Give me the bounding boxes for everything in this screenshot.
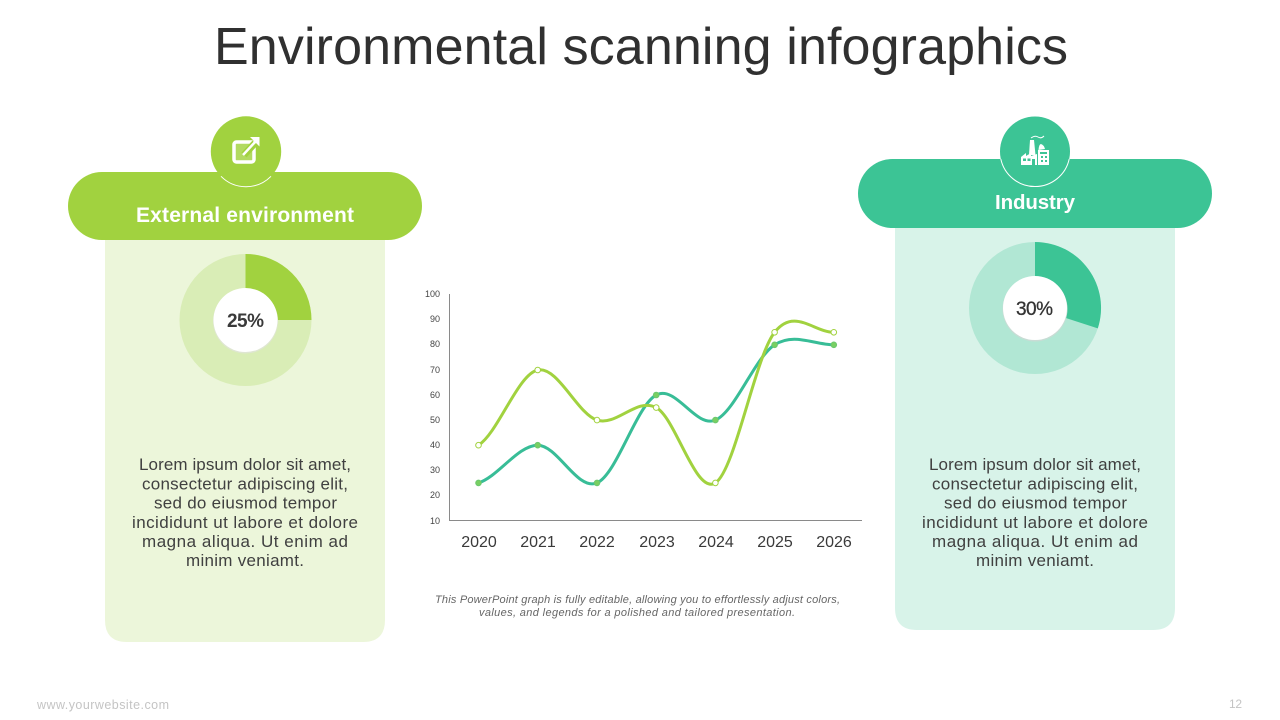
y axis labels: 100 xyxy=(425,289,440,299)
y axis labels: 20 xyxy=(430,490,440,500)
body text: minim veniamt. xyxy=(186,551,304,570)
body text: minim veniamt. xyxy=(976,551,1094,570)
line chart xyxy=(425,289,862,551)
y axis labels: 30 xyxy=(430,465,440,475)
donut chart: 30%: 30% xyxy=(1016,299,1053,320)
donut chart: 25% xyxy=(180,254,312,386)
series: teal line xyxy=(478,339,834,484)
panel background xyxy=(105,230,385,642)
x axis labels: 2022 xyxy=(579,534,615,551)
body text: sed do eiusmod tempor xyxy=(154,494,337,512)
y axis labels: 90 xyxy=(430,314,440,324)
icon badge: factory xyxy=(1000,116,1070,187)
teal markers xyxy=(476,342,837,486)
body text: sed do eiusmod tempor xyxy=(944,494,1127,512)
y axis labels: 80 xyxy=(430,339,440,349)
y axis labels xyxy=(425,289,440,526)
body text xyxy=(922,455,1148,570)
donut chart: 25%: 25% xyxy=(227,311,264,332)
x axis labels: 2021 xyxy=(520,534,556,551)
icon badge: external link xyxy=(211,116,281,187)
body text: Lorem ipsum dolor sit amet, xyxy=(929,455,1141,474)
caption: values, and legends for a polished and tailored presentation. xyxy=(479,607,795,619)
panel background xyxy=(895,220,1175,630)
axes xyxy=(450,294,862,520)
x axis labels: 2024 xyxy=(698,534,734,551)
y axis labels: 40 xyxy=(430,440,440,450)
body text: consectetur adipiscing elit, xyxy=(932,474,1138,494)
caption: This PowerPoint graph is fully editable, allowing you to effortlessly adjust colors, xyxy=(435,594,840,606)
panel: external environment xyxy=(68,116,422,642)
panel: industry xyxy=(858,116,1212,630)
x axis labels: 2023 xyxy=(639,534,675,551)
body text: incididunt ut labore et dolore xyxy=(922,513,1148,532)
y axis labels: 70 xyxy=(430,365,440,375)
lime markers xyxy=(476,330,837,486)
x axis labels: 2025 xyxy=(757,534,793,551)
donut chart: 30% xyxy=(969,242,1101,374)
body text: magna aliqua. Ut enim ad xyxy=(142,532,348,551)
body text: Lorem ipsum dolor sit amet, xyxy=(139,455,351,474)
body text: magna aliqua. Ut enim ad xyxy=(932,532,1138,551)
title: Environmental scanning infographics xyxy=(214,18,1068,76)
heading: industry: Industry xyxy=(995,191,1076,214)
x axis labels: 2026 xyxy=(816,534,852,551)
series: lime line xyxy=(478,321,834,484)
header pill xyxy=(68,172,422,240)
x axis labels xyxy=(461,534,852,551)
footer: page number: 12 xyxy=(1229,697,1242,711)
body text: consectetur adipiscing elit, xyxy=(142,474,348,494)
body text xyxy=(132,455,358,570)
header pill xyxy=(858,159,1212,228)
y axis labels: 60 xyxy=(430,390,440,400)
footer: website: www.yourwebsite.com xyxy=(36,698,169,712)
y axis labels: 50 xyxy=(430,415,440,425)
x axis labels: 2020 xyxy=(461,534,497,551)
caption xyxy=(435,594,840,619)
y axis labels: 10 xyxy=(430,516,440,526)
body text: incididunt ut labore et dolore xyxy=(132,513,358,532)
heading: external environment: External environment xyxy=(136,204,354,227)
